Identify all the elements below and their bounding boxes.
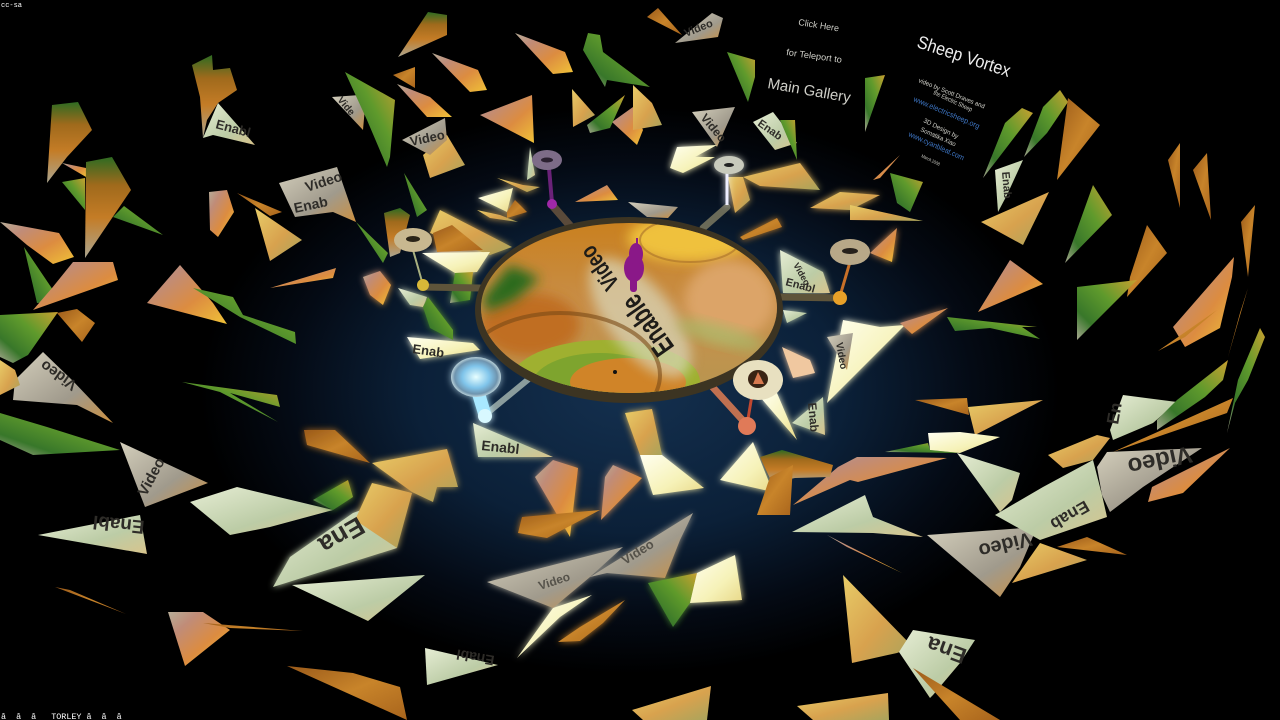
sign: teleport to main gallery [766, 17, 852, 107]
shard labels: Enable and Video lettering: Vide [335, 95, 357, 118]
shard labels: Enable and Video lettering: Enabl [481, 437, 520, 457]
shard labels: Enable and Video lettering: Enabl [214, 116, 252, 140]
shard labels: Enable and Video lettering: Video [37, 356, 80, 394]
sign: sheep vortex credits: the Electric Sheep [932, 89, 973, 114]
teleport node: purple [532, 150, 562, 209]
shard labels: Enable and Video lettering: Video [619, 536, 656, 568]
sign: sheep vortex credits: 3D Design by [922, 118, 960, 141]
shard labels: Enable and Video lettering: Video [409, 127, 446, 149]
shard labels: Enable and Video lettering: Video [683, 17, 715, 40]
disc lettering: Video [576, 240, 625, 295]
sign: sheep vortex credits: www.cyanbleat.com [906, 129, 966, 162]
sign: teleport to main gallery: Click Here [798, 17, 840, 33]
shard labels: Enable and Video lettering: Video [303, 168, 344, 195]
shards: near platform glowing [273, 145, 948, 658]
shard labels: Enable and Video lettering: En [1103, 401, 1126, 426]
shard labels: Enable and Video lettering: Video [833, 342, 849, 370]
sign: sheep vortex credits: video by Scott Draves and [917, 77, 986, 111]
central platform [423, 205, 840, 437]
sign: teleport to main gallery: for Teleport to [786, 47, 843, 65]
teleport node: yellow [394, 228, 432, 291]
shard labels: Enable and Video lettering: Ena [923, 631, 970, 669]
shard labels: Enable and Video lettering: Video [791, 261, 812, 288]
shards: left side [0, 55, 498, 720]
shard labels: Enable and Video lettering: Video [698, 111, 729, 145]
shard labels: Enable and Video lettering: Enab [755, 118, 784, 143]
sign: sheep vortex credits [906, 32, 1013, 167]
shard labels: Enable and Video lettering: Enab [292, 193, 329, 216]
disc lettering [576, 240, 681, 362]
sign: sheep vortex credits: March 2008 [921, 153, 941, 167]
shard labels: Enable and Video lettering: Video [135, 455, 169, 499]
sign: sheep vortex credits: www.electricsheep.org [911, 94, 981, 131]
shard labels: Enable and Video lettering: Enab [999, 171, 1013, 199]
shard labels: Enable and Video lettering: Enab [805, 402, 822, 432]
disc surface [481, 223, 777, 393]
disc rim [475, 217, 783, 403]
teleport node: cyan [451, 357, 501, 423]
teleport node: salmon [733, 360, 783, 435]
shards: right side [632, 90, 1265, 720]
teleport node: white [714, 156, 744, 205]
sign: sheep vortex credits: Sheep Vortex [915, 32, 1013, 81]
shard labels: Enable and Video lettering: Enabl [784, 276, 816, 296]
disc texture [481, 223, 777, 393]
shard labels: Enable and Video lettering: Enabl [92, 511, 146, 537]
shard labels: Enable and Video lettering: Enab [1047, 497, 1092, 534]
shard labels: Enable and Video lettering: Ena [313, 511, 370, 561]
shard labels: Enable and Video lettering: Video [537, 570, 572, 593]
sign: sheep vortex credits: Somatika Xiao [919, 126, 957, 148]
connector arms [423, 205, 840, 425]
shards: top [356, 8, 885, 263]
avatar [624, 238, 644, 292]
shard labels: Enable and Video lettering: Video [1125, 440, 1194, 480]
shard labels: Enable and Video lettering: Enab [412, 341, 445, 360]
teleport node: orange [830, 239, 870, 305]
shard labels: Enable and Video lettering: Enabl [455, 646, 496, 669]
license tag: cc-sa [1, 2, 22, 10]
sign: teleport to main gallery: Main Gallery [766, 75, 852, 107]
shard labels: Enable and Video lettering: Video [976, 527, 1034, 562]
disc lettering: Enable [616, 288, 681, 362]
